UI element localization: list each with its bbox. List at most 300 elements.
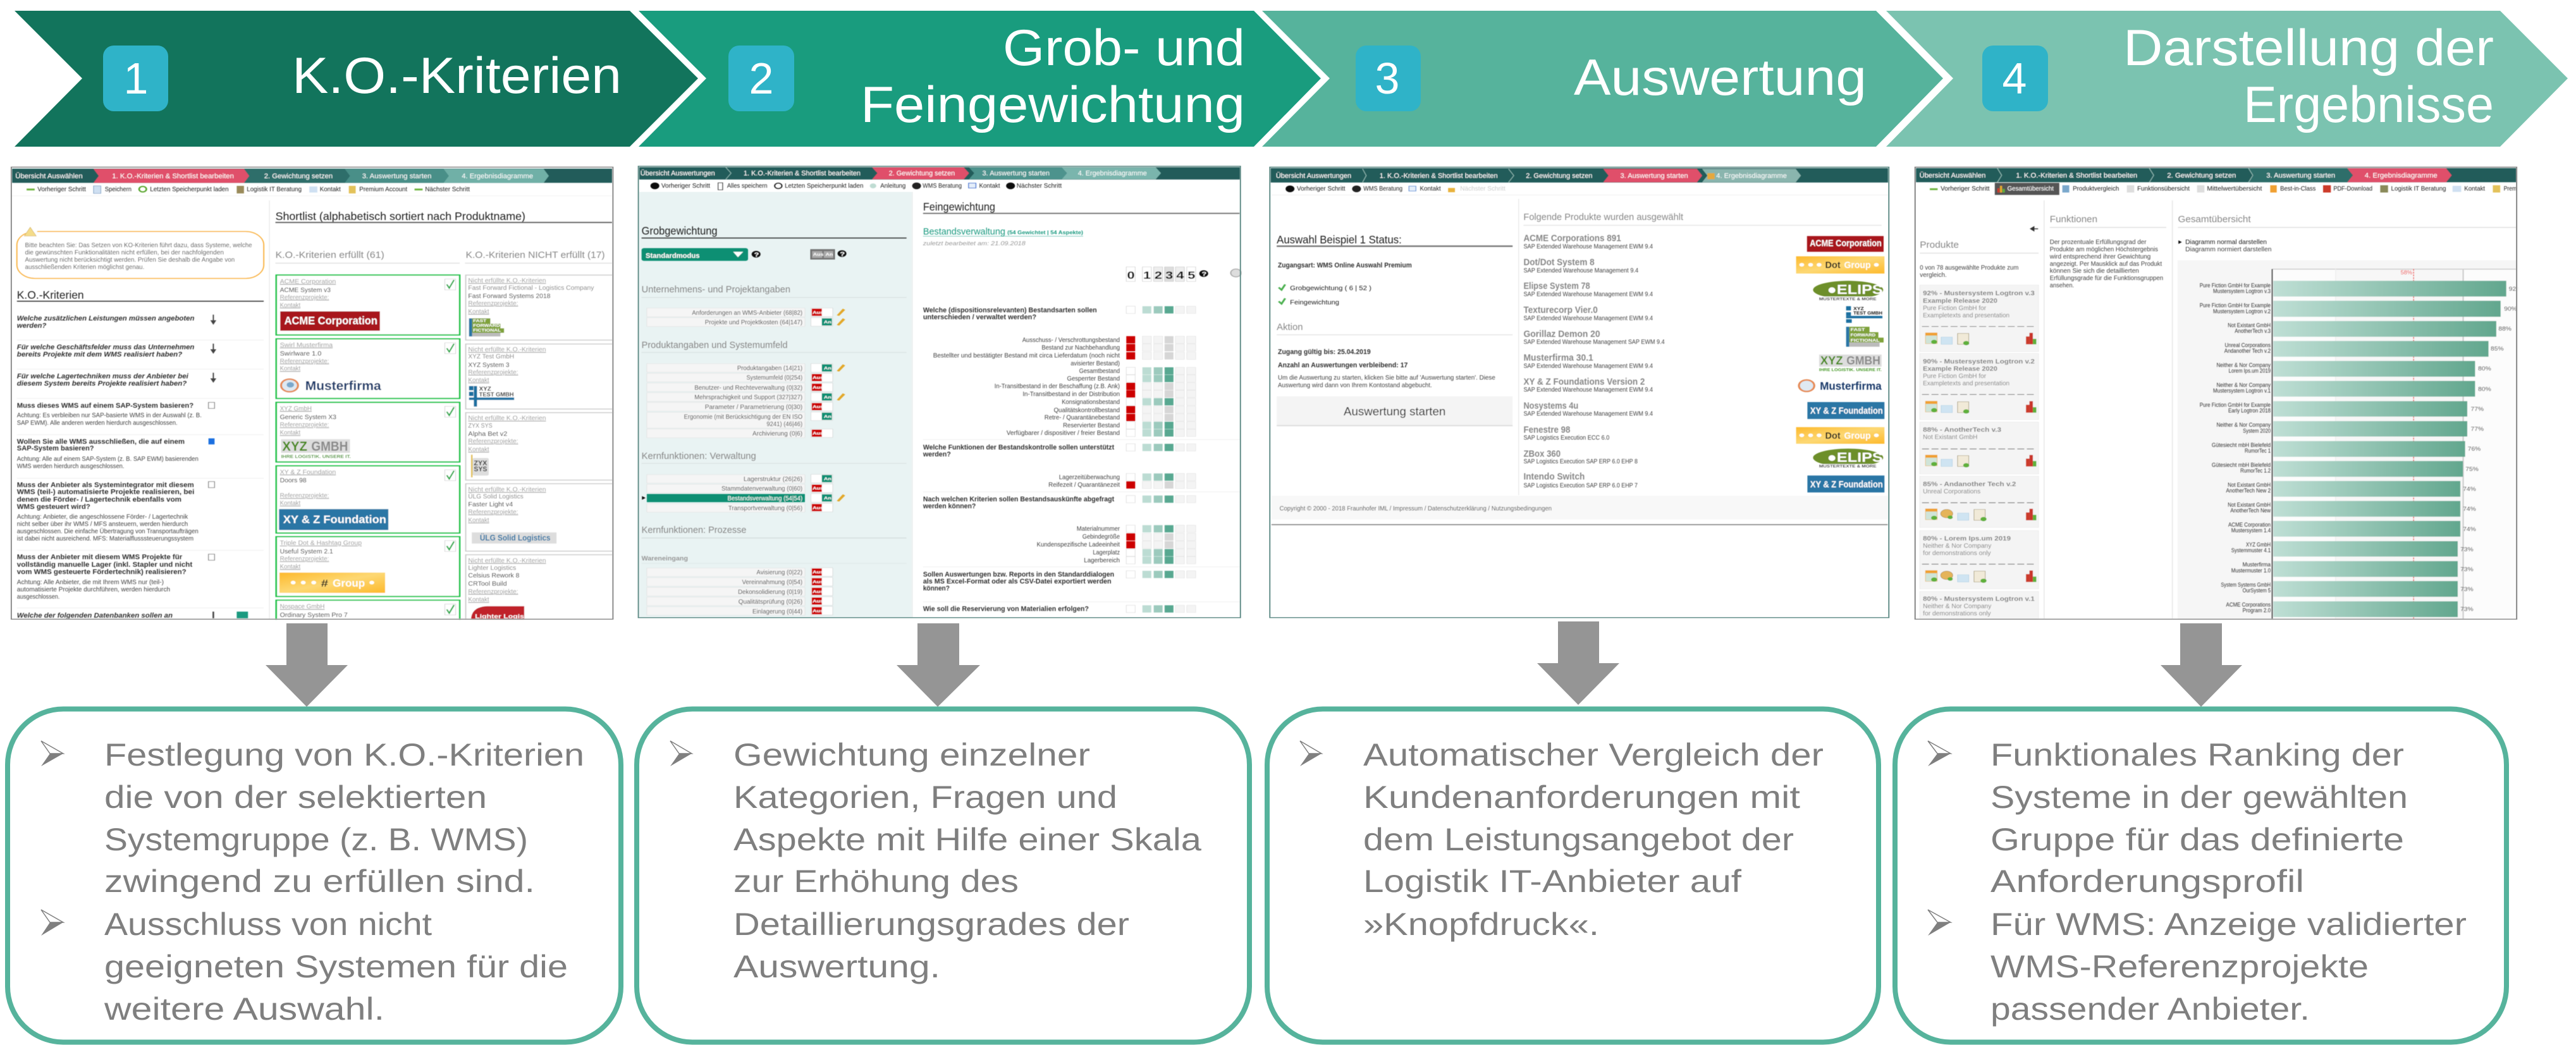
mode dropdown: ? [840,251,845,258]
status block: Auswahl Beispiel 1 Status: [1277,234,1402,246]
rating scale: 3 [1165,270,1173,281]
product list: SAP Extended Warehouse Management EWM 9.4 [1523,410,1653,417]
chart product labels: Pure Fiction GmbH for Example [2200,402,2271,408]
text: Funktionen: ansehen. [2050,282,2074,289]
bar chart: Gesamtübersicht: 74% [2463,526,2476,532]
section: Produktangaben und Systemumfeld: Archivierung (0|6) [752,430,802,437]
navigation tabs: 2. Gewichtung setzen [264,172,333,180]
question list: Muss der Anbieter mit diesem WMS Projekte für [17,553,182,561]
card: XYZ Test GmbH [466,344,619,409]
text: Ausschluss [104,907,568,1027]
text: Gewichtung: zur Erhöhung des [733,864,1019,899]
text: Funktionen: wird entsprechend ihrer Gewichtung [2049,253,2150,260]
action block: Anzahl an Auswertungen verbleibend: 17 [1278,361,1408,369]
question list: WMS gesteuert wird? [17,503,90,510]
vendor logos: FORWARD [1851,333,1876,338]
bar chart: Gesamtübersicht: 85% [2491,346,2504,352]
bullet [1928,741,1951,766]
title: Darstellung der Ergebnisse: Ergebnisse [2243,76,2494,133]
chart product labels: ACME Corporations [2226,602,2271,608]
question: Bestandskontrolle: Reifezeit / Quarantänezeit [1048,481,1120,488]
question list: Für welche Geschäftsfelder muss das Unternehmen [17,343,194,351]
card: Triple Dot & Hashtag Group: Triple Dot & Hashtag Group [280,539,362,547]
product sidebar: Example Release 2020 [1923,365,1997,372]
card: ACME Corporation: ACME Corporation [280,278,336,285]
section: Unternehmens- und Projektangaben: Unternehmens- und Projektangaben [642,284,790,295]
heading: Shortlist [276,211,612,264]
card: Triple Dot & Hashtag Group: # [321,578,328,589]
card: Nospace GmbH: Nospace GmbH [280,602,324,610]
question list: Achtung: Es verbleiben nur SAP-basierte WMS in der Auswahl (z. B. [17,412,202,419]
section: Kernfunktionen Verwaltung: Aus [813,505,824,510]
heading: Feingewichtung: (54 Gewichtet | 54 Aspekte) [1007,230,1083,236]
card: Fast Forward Fictional: Fast Forward Systems 2018 [468,292,551,300]
text: Gewichtung: Aspekte mit Hilfe einer Skala [733,822,1201,857]
question list: werden? [17,321,46,329]
card: ÜLG Solid Logistics: Nicht erfüllte K.O.-Kriterien [468,486,546,493]
section: Kernfunktionen Prozesse: Einlagerung (0|44) [752,608,802,615]
bar chart: Gesamtübersicht: 73% [2460,547,2474,553]
question list: denen die Förder- / Lagertechnik ebenfalls vom [17,495,181,503]
section: Kernfunktionen Prozesse: Aus [813,599,824,604]
question list: Achtung: Alle Anbieter, die mit Ihrem WMS nur (teil-) [17,578,164,585]
card: Swirl Musterfirma: Referenzprojekte: [280,357,329,365]
section: Produktangaben und Systemumfeld: Aus [813,376,824,380]
heading: Feingewichtung: zuletzt bearbeitet am: 21.09.2018 [923,240,1026,247]
chart product labels: Not Existant GmbH [2228,482,2271,488]
product list: SAP Extended Warehouse Management EWM 9.4 [1523,362,1653,369]
toolbar: Kontakt [1420,185,1441,192]
callout: warning note: die gewünschten Funktionalitäten nicht erfüllen, bei der nachfolgenden [25,248,224,256]
product list: Dot/Dot System 8 [1523,257,1595,267]
bar chart: Gesamtübersicht: 73% [2460,606,2474,613]
text: Funktionen: Der prozentuale Erfüllungsgrad der [2050,238,2147,245]
card: Swirl Musterfirma: Musterfirma [305,379,381,393]
card: Lighter Logistics [466,555,619,625]
vendor logos: MUSTERTEXTE & MORE [1819,464,1876,468]
bar chart: Gesamtübersicht [2178,260,2522,620]
title: Darstellung der Ergebnisse [2123,20,2494,133]
card: XYZ GmbH: Kontakt [280,429,301,436]
text: Ausschluss: Ausschluss von nicht [104,907,432,942]
mode dropdown: ? [754,252,759,258]
toolbar: Logistik IT Beratung [2391,185,2446,192]
card: ZYX SYS: Alpha Bet v2 [468,430,507,437]
card: XYZ Test GmbH: Kontakt [468,376,489,384]
text: Funktionales Ranking: Funktionales Ranking der [1990,737,2404,773]
chart product labels: Systemmuster 4.1 [2231,547,2271,554]
text box 2 [637,709,1249,1042]
vendor logos: Dot [1825,260,1841,270]
section: Kernfunktionen Prozesse: Qualitätsprüfung (0|26) [739,598,802,606]
chart product labels: Lorem Ips.um 2019 [2229,368,2271,374]
navigation tabs: 1. K.O.-Kriterien & Shortlist bearbeiten [112,172,234,180]
step 4 chevron [1886,11,2568,147]
card: Fast Forward Fictional: Nicht erfüllte K.O.-Kriterien [468,277,546,284]
product sidebar: Not Existant GmbH [1923,433,1977,441]
card: Fast Forward Fictional: Referenzprojekte: [468,300,518,307]
bullet [670,741,692,766]
chart product labels: Mustersystem Logtron v.3 [2213,288,2271,295]
toolbar: Mittelwertübersicht [2207,185,2262,192]
vendor logos: MUSTERTEXTE & MORE [1819,296,1876,301]
toolbar: Vorheriger Schritt [661,182,711,189]
toolbar: Nächster Schritt [1017,182,1062,189]
chart product labels: Gütesiecht mbH Bielefeld [2212,462,2271,468]
question: Bestandsauskünfte: Lagerplatz [1093,549,1120,556]
question: Reports: als MS Excel-Format oder als CSV-Datei exportiert werden [923,577,1112,585]
toolbar [12,185,612,619]
product sidebar: 92% - Mustersystem Logtron v.3 [1923,289,2035,297]
rating scale: ? [1202,271,1206,278]
text: Ausschluss: geeigneten Systemen für die [104,949,568,984]
card: Swirl Musterfirma: Swirlware 1.0 [280,350,321,357]
text: Automatischer Vergleich: Logistik IT-Anbieter auf [1363,864,1741,899]
section: Produktangaben und Systemumfeld: Benutzer- und Rechteverwaltung (0|32) [694,384,802,391]
heading: Shortlist: K.O.-Kriterien erfüllt (61) [276,249,384,260]
card: ÜLG Solid Logistics: Faster Light v4 [468,501,513,508]
heading: Feingewichtung: Feingewichtung [923,202,995,213]
section: Produktangaben und Systemumfeld: Mehrsprachigkeit und Support (327|327) [694,393,802,401]
bar chart: Gesamtübersicht: 80% [2478,386,2491,393]
status block: Feingewichtung [1290,298,1339,306]
section: Kernfunktionen Prozesse: Dekonsolidierung (0|19) [738,588,802,596]
vendor logos: Dot [1825,431,1841,441]
question: Bestandsarten: Reservierter Bestand [1063,422,1120,429]
section: Kernfunktionen Verwaltung: Aus [813,486,824,491]
panel: screenshot Auswertung [1269,167,1889,618]
heading: Gesamtübersicht: Diagramm normiert darstellen [2185,245,2272,253]
toolbar [651,182,1062,190]
text: Festlegung: zwingend zu erfüllen sind. [104,864,535,899]
product list: SAP Extended Warehouse Management EWM 9.4 [1523,386,1653,393]
card: XY & Z Foundation: Doors 98 [280,477,307,484]
footer: Copyright © 2000 - 2018 Fraunhofer IML / Impressum / Datenschutzerklärung / Nutzungsbedingungen [1280,504,1552,512]
question list: Muss dieses WMS auf einem SAP-System basieren? [17,401,193,410]
text: Funktionen: Funktionen [2050,214,2097,224]
chart product labels: Musterfirma [2243,562,2271,568]
chart product labels: System Systems GmbH [2221,582,2271,588]
section: Kernfunktionen Verwaltung: An [824,496,831,501]
question: Bestandskontrolle [923,443,1239,492]
section: Produktangaben und Systemumfeld: An [824,394,831,400]
callout: warning note: ausschließenden Kriterien möglichst genau. [25,263,144,271]
card: XYZ GmbH: GMBH [311,439,348,454]
rating scale: 1 [1143,270,1151,281]
rating scale: 4 [1176,270,1184,281]
toolbar: Gesamtübersicht [2008,185,2054,192]
product list: SAP Extended Warehouse Management SAP EWM 9.4 [1523,338,1665,346]
card: XYZ GmbH: XYZ [282,439,307,454]
bar chart: Gesamtübersicht: 74% [2463,486,2476,492]
text: Gewichtung: Kategorien, Fragen und [733,779,1117,815]
toolbar: Nächster Schritt [1460,185,1506,192]
card: ZYX SYS: SYS [474,465,487,473]
section: Produktangaben und Systemumfeld [642,339,907,437]
product sidebar: 90% - Mustersystem Logtron v.2 [1923,357,2035,365]
card: ÜLG Solid Logistics [466,484,619,551]
chart product labels: Not Existant GmbH [2228,502,2271,508]
bar chart: Gesamtübersicht: 90% [2504,306,2517,312]
chart product labels: Mustermuster 1.0 [2231,568,2271,574]
card: XY & Z Foundation: Referenzprojekte: [280,492,329,499]
card: Fast Forward Fictional: FORWARD [473,323,500,328]
question: Bestandsauskünfte [923,495,1239,567]
question: Bestandsarten: Retre- / Quarantänebestand [1045,413,1120,421]
question list: nicht selber über ihr WMS / MFS ansteuern, werden hierdurch [17,520,188,528]
card: XYZ GmbH: Generic System X3 [280,413,336,420]
question list: Welche der folgenden Datenbanken sollen an [17,611,173,620]
section: Produktangaben und Systemumfeld: Ergonomie (mit Berücksichtigung der EN ISO [684,413,802,420]
product sidebar: Unreal Corporations [1923,487,1981,495]
navigation tabs: 3. Auswertung starten [983,169,1050,177]
card: Swirl Musterfirma: Kontakt [280,365,301,372]
card: ÜLG Solid Logistics: ÜLG Solid Logistics [468,492,524,500]
navigation tabs: 1. K.O.-Kriterien & Shortlist bearbeiten [744,169,861,177]
question list: vom WMS gesteuerte Fördertechnik) realisieren? [17,568,187,576]
question list: ausgeschlossen. [17,593,59,600]
navigation tabs: Übersicht Auswählen [15,172,83,180]
text: Festlegung: Festlegung von K.O.-Kriterien [104,737,584,773]
chart product labels [2200,283,2271,614]
chart product labels: Neither & Nor Company [2216,422,2271,429]
product sidebar: 85% - Andanother Tech v.2 [1923,480,2016,487]
card: XYZ Test GmbH: XYZ [479,386,491,392]
heading: Feingewichtung: Bestandsverwaltung [923,226,1005,236]
badge 1 [103,46,168,111]
product sidebar: Pure Fiction GmbH for [1923,304,1987,312]
chart product labels: Mustersystem Logtron v.1 [2213,388,2271,394]
vendor logos: Group [1844,431,1871,441]
text: Automatischer Vergleich: dem Leistungsangebot der [1363,822,1794,857]
product list: SAP Logistics Execution SAP ERP 6.0 EHP 7 [1523,482,1638,489]
rating scale: 0 [1127,270,1135,281]
text: Funktionales Ranking: Gruppe für das definierte [1990,822,2404,857]
section: Unternehmens- und Projektangaben: An [824,320,831,324]
card: ZYX SYS: Referenzprojekte: [468,437,518,445]
card: ÜLG Solid Logistics: Referenzprojekte: [468,508,518,516]
card: Swirl Musterfirma: Swirl Musterfirma [280,341,333,348]
product list: XY & Z Foundations Version 2 [1523,376,1645,387]
product list: ZBox 360 [1523,448,1561,459]
product list: Gorillaz Demon 20 [1523,329,1600,339]
product list: SAP Extended Warehouse Management EWM 9.4 [1523,314,1653,322]
section: Produktangaben und Systemumfeld: Parameter / Parametrierung (0|30) [705,403,802,411]
card: Triple Dot & Hashtag Group: Referenzprojekte: [280,555,329,563]
section: Kernfunktionen Verwaltung [642,450,907,512]
product sidebar: Neither & Nor Company [1923,542,1992,549]
card: ZYX SYS: Nicht erfüllte K.O.-Kriterien [468,414,546,422]
section: Kernfunktionen Prozesse: Wareneingang [642,554,688,562]
text: Festlegung [104,737,584,899]
product sidebar: for demonstrations only [1923,549,1991,556]
section: Unternehmens- und Projektangaben: Aus [813,310,824,315]
toolbar: Premium Account [359,185,408,193]
toolbar: Kontakt [2464,185,2485,192]
question: Bestandsarten: unterschieden / verwaltet werden? [923,313,1036,321]
section: Unternehmens- und Projektangaben: Projekte und Projektkosten (64|147) [705,319,802,326]
navigation tabs: 1. K.O.-Kriterien & Shortlist bearbeiten [1380,171,1498,180]
question list: vollständig manuelle Lager (inkl. Stapler und nicht [17,560,193,568]
action block: Auswertung wird dann von Ihrem Kontostand abgebucht. [1278,381,1432,389]
card: XY & Z Foundation: XY & Z Foundation [280,468,336,475]
button: Auswertung starten [1277,396,1512,426]
card: XYZ GmbH [276,402,460,462]
question: Bestandsarten: avisierter Bestand) [1070,360,1120,367]
mode dropdown: Aus [813,252,824,257]
navigation tabs: 4. Ergebnisdiagramme [462,172,533,180]
chart product labels: System 2020 [2243,428,2271,434]
question list: ausgeschlossen. Die einfache Übertragung von Transportaufträgen [17,527,199,535]
question: Bestandsarten: Bestellter und bestätigter Bestand mit circa Lieferdatum (noch nicht [933,351,1120,359]
card: XY & Z Foundation: Kontakt [280,499,301,507]
question list: WMS werden hierdurch ausgeschlossen. [17,462,124,470]
card: Triple Dot & Hashtag Group: Kontakt [280,563,301,570]
card: Nospace GmbH [276,600,460,625]
text: Automatischer Vergleich: Kundenanforderungen mit [1363,779,1800,815]
badge 4 [1982,46,2048,111]
card: ACME Corporation: ACME Corporation [285,315,377,327]
step 1 chevron [15,11,698,147]
arrow 4 [2161,623,2242,707]
section: Kernfunktionen Prozesse: Vereinnahmung (0|54) [742,578,802,585]
section: Produktangaben und Systemumfeld: Aus [813,405,824,409]
question: Bestandsauskünfte: werden können? [923,502,976,510]
section: Unternehmens- und Projektangaben: Anforderungen an WMS-Anbieter (68|82) [692,309,802,316]
chart product labels: Neither & Nor Company [2216,362,2271,369]
card: XYZ GmbH: XYZ GmbH [280,405,312,412]
card: ZYX SYS: ZYX [474,459,487,467]
card: Lighter Logistics: Kontakt [468,596,489,603]
question: Bestandsarten: Welche (dispositionsrelevanten) Bestandsarten sollen [923,306,1097,314]
question list: Achtung: Anbieter, die angeschlossene Förder- / Lagertechnik [17,513,188,520]
badge 2 [728,46,794,111]
question: Bestandsarten: Gesamtbestand [1079,367,1120,375]
section: Produktangaben und Systemumfeld: Systemumfeld (0|254) [746,374,802,381]
text: Automatischer Vergleich: Automatischer Vergleich der [1363,737,1824,773]
question: Bestandsarten: In-Transitbestand in der Beschaffung (z.B. Ank) [995,382,1120,390]
card: ZYX SYS: ZYX SYS [468,422,493,429]
question: Bestandsauskünfte: Lagerbereich [1084,556,1120,564]
toolbar: Best-in-Class [2280,185,2316,192]
section: Kernfunktionen Verwaltung: Transportverwaltung (0|56) [728,504,802,511]
question list: Wollen Sie alle WMS ausschließen, die auf einem [17,437,185,446]
panel: screenshot K.O.-Kriterien [10,167,1205,620]
chart product labels: AnotherTech New [2230,508,2271,514]
question: Reports [923,570,1239,613]
toolbar: Kontakt [979,182,1000,189]
navigation tabs: 4. Ergebnisdiagramme [2365,171,2438,180]
question list: Achtung: Alle auf einem SAP-System (z. B. SAP EWM) basierenden [17,455,199,462]
text: Funktionales Ranking [1990,737,2408,899]
text box 1 [8,709,621,1042]
vendor logos [1796,236,1884,492]
panel: screenshot Ergebnisdiagramme [1915,167,2522,620]
toolbar: Kontakt [320,185,341,193]
heading: Grobgewichtung: Grobgewichtung [642,226,718,237]
toolbar: Funktionsübersicht [2137,185,2190,192]
question: Reports: können? [923,584,950,592]
product list: ACME Corporations 891 [1523,233,1621,243]
section: Kernfunktionen Prozesse: Aus [813,580,824,584]
question: Bestandsarten: Ausschuss- / Verschrottungsbestand [1022,336,1120,343]
chart product labels: Pure Fiction GmbH for Example [2200,303,2271,309]
card: ZYX SYS: Kontakt [468,446,489,453]
card: XY & Z Foundation [276,466,460,533]
toolbar: PDF-Download [2333,185,2372,192]
bar chart: Gesamtübersicht: 88% [2498,326,2512,333]
section: Produktangaben und Systemumfeld: Produktangaben (14|21) [737,364,802,372]
card: Lighter Logistics: Lighter Logistics [468,564,516,571]
bar chart: Gesamtübersicht: 77% [2471,426,2484,432]
card: XYZ GmbH: Referenzprojekte: [280,421,329,429]
chart product labels: Mustersystem 1.4 [2231,528,2271,534]
toolbar: Letzten Speicherpunkt laden [785,182,864,189]
arrow 3 [1537,621,1619,705]
text: Gewichtung: Detaillierungsgrades der [733,907,1129,942]
section: Produktangaben und Systemumfeld: Aus [813,385,824,390]
vendor logos: TEST GMBH [1853,310,1882,315]
card: ACME Corporation: Kontakt [280,301,301,309]
action block: Zugang gültig bis: 25.04.2019 [1278,348,1371,355]
heading: Gesamtübersicht: Gesamtübersicht [2178,214,2251,224]
toolbar: Anleitung [880,182,905,189]
chart product labels: RumorTec 1 [2245,448,2271,454]
product sidebar: 88% - AnotherTech v.3 [1923,425,2001,433]
toolbar: Vorheriger Schritt [37,185,86,193]
section: Kernfunktionen Prozesse: Aus [813,589,824,594]
card: ÜLG Solid Logistics: Kontakt [468,516,489,523]
badge 3 [1356,46,1421,111]
card: Lighter Logistics: Celsius Rework 8 [468,571,520,579]
question: Bestandsarten: Konsignationsbestand [1062,398,1120,405]
product sidebar: vergleich. [1920,271,1947,278]
chart product labels: Mustersystem Logtron v.2 [2213,309,2271,315]
vendor logos: ●ELIPS [1827,283,1883,297]
chart product labels: Pure Fiction GmbH for Example [2200,283,2271,289]
badge 3: 3 [1375,54,1399,103]
text: Für WMS [1990,907,2467,1027]
heading: K.O.-Kriterien: K.O.-Kriterien [17,290,84,302]
question: Bestandskontrolle: Lagerzeitüberwachung [1059,474,1120,481]
bar chart: Gesamtübersicht: 77% [2471,406,2484,412]
question list: bereits Projekte mit dem WMS realisiert haben? [17,350,182,358]
mode dropdown [642,248,847,261]
question list [17,314,264,620]
product list: SAP Extended Warehouse Management 9.4 [1523,266,1639,274]
rating scale: 2 [1155,270,1162,281]
text: Für WMS: passender Anbieter. [1990,991,2310,1027]
chart product labels: Unreal Corporations [2224,343,2271,348]
chart product labels: AnotherTech New 2 [2226,488,2271,494]
question list: WMS (teil-) automatisierte Projekte realisieren, bei [17,487,194,496]
text: Automatischer Vergleich [1363,737,1824,942]
chart product labels: Early Logtron 2018 [2228,408,2271,414]
product list: Elipse System 78 [1523,281,1590,291]
bullet [41,741,63,766]
product list: Nosystems 4u [1523,400,1578,411]
badge 4: 4 [2003,54,2027,103]
navigation tabs: 2. Gewichtung setzen [2167,171,2236,180]
callout: warning note: Auswertung nicht berücksichtigt werden. Prüfen Sie deshalb die Angabe von [25,256,235,264]
chart product labels: RumorTec 1.2 [2240,468,2271,474]
question: Bestandsauskünfte: Nach welchen Kriterien sollen Bestandsauskünfte abgefragt [923,495,1115,503]
bar chart: Gesamtübersicht: 80% [2478,366,2491,372]
navigation tabs [1271,168,1888,183]
text: Funktionales Ranking: Systeme in der gewählten [1990,779,2408,815]
bar chart: Gesamtübersicht: 73% [2460,587,2474,592]
product list: SAP Logistics Execution SAP ERP 6.0 EHP 8 [1523,458,1638,465]
